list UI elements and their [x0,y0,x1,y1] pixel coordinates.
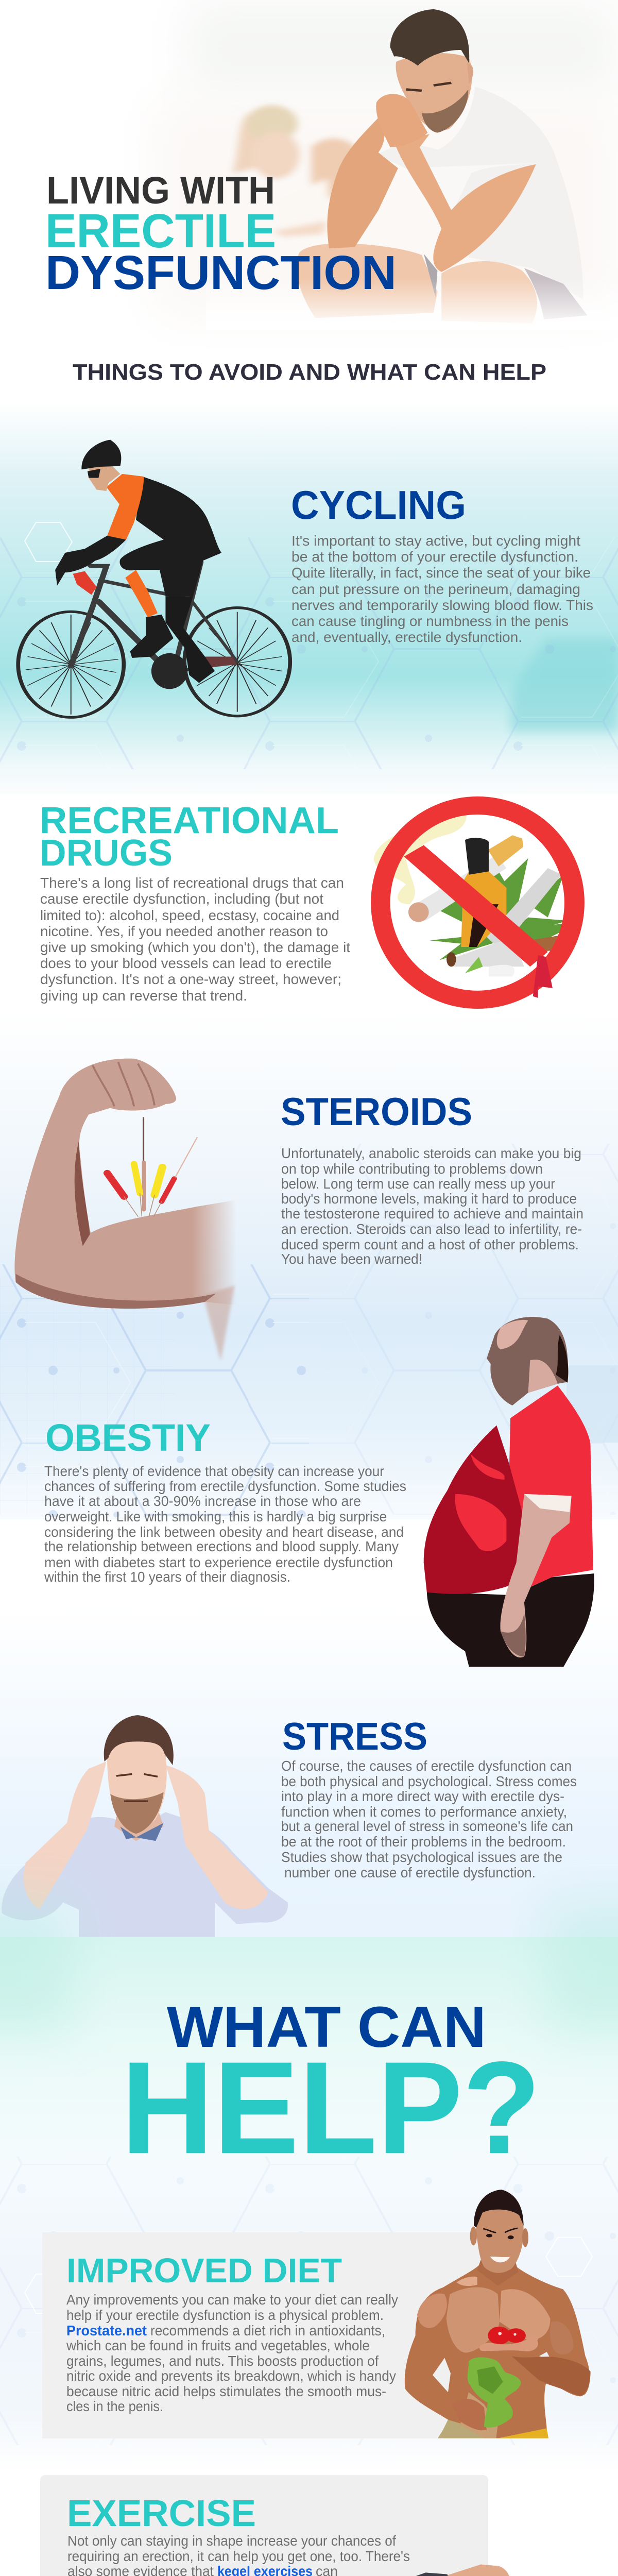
arm [14,1059,236,1309]
panel: cycling background [0,402,618,794]
heading: CYCLING [291,482,466,528]
shorts [260,2572,459,2576]
body: have it at about a 30-90% increase in those who are [44,1493,361,1509]
section: obesity text [44,1416,406,1585]
body: because nitric acid helps stimulates the smooth mus- [66,2383,386,2399]
hair [474,2190,524,2227]
drivetrain [151,653,187,689]
body [40,875,350,1004]
biceps lower shadow [16,1274,216,1309]
body: be both physical and psychological. Stress comes [281,1773,577,1789]
body: requiring an erection, it can help you get one, too. There's [67,2548,410,2564]
thigh [448,2564,513,2576]
heading: what can help: HELP? [121,2035,541,2181]
body: cause erectile dysfunction, including (but not [40,891,323,907]
body: dysfunction. It's not a one-way street, however; [40,971,341,987]
beard [110,1792,164,1834]
body: within the first 10 years of their diagnosis. [44,1569,290,1585]
illustration: cyclist [18,440,290,717]
shoe [130,615,174,658]
smoke [374,799,467,904]
belly highlight [455,1494,506,1551]
ears [470,2227,528,2247]
hands [376,94,427,147]
chest highlights [447,2287,500,2353]
body: and, eventually, erectile dysfunction. [291,629,522,645]
title: LIVING WITH [46,169,275,212]
hair [390,9,469,66]
body: body's hormone levels, making it hard to produce [281,1191,577,1207]
syringe [487,868,562,950]
body: There's a long list of recreational drugs that can [40,875,344,891]
title [45,169,397,299]
body: does to your blood vessels can lead to erectile [40,955,332,971]
subtitle: THINGS TO AVOID AND WHAT CAN HELP [73,360,546,385]
body: Of course, the causes of erectile dysfunction can [281,1758,572,1774]
body: Not only can staying in shape increase your chances of [67,2533,396,2549]
body: chances of suffering from erectile dysfunction. Some studies [44,1478,406,1494]
arm [500,1494,572,1657]
forearms [24,1761,107,1910]
glove [55,549,96,586]
body [66,2292,398,2414]
face [475,2204,524,2273]
hero photo: sad man [297,9,587,324]
body: the relationship between erections and blood supply. Many [44,1538,399,1554]
body [281,1145,583,1267]
cigarette [410,855,506,921]
body: be at the bottom of your erectile dysfunction. [291,549,578,565]
body: nitric oxide and prevents its breakdown, which is handy [66,2368,396,2384]
front wheel [18,612,124,717]
helmet [81,440,121,469]
body: There's plenty of evidence that obesity can increase your [44,1463,384,1479]
inner arm shadow [75,1141,90,1246]
shirt back [508,1385,593,1595]
body [281,1758,577,1880]
head [487,1317,568,1405]
body: nerves and temporarily slowing blood flow. This [291,597,593,613]
hero background [154,0,618,317]
paper [460,2392,498,2438]
section: recreational drugs text [40,800,350,1004]
illustration: obese man [424,1317,594,1667]
panel: improved diet [42,2232,516,2438]
body: nicotine. Yes, if you needed another reason to [40,923,328,939]
right arm [394,134,536,272]
body: Any improvements you can make to your diet can really [66,2292,398,2308]
body [44,1463,406,1585]
body: into play in a more direct way with erectile dys- [281,1788,564,1804]
body: Studies show that psychological issues are the [281,1849,562,1865]
legs [297,243,437,318]
heading: IMPROVED DIET [66,2251,342,2290]
section: stress text [281,1715,577,1880]
body: can put pressure on the perineum, damaging [291,581,580,597]
body: Prostate.net [66,2323,147,2338]
hair [104,1715,174,1765]
body: limited to): alcohol, speed, ecstasy, cocaine and [40,907,339,923]
forearm [85,536,126,561]
heading: STRESS [282,1715,427,1758]
icon: no drugs sign [371,796,585,1009]
body: help if your erectile dysfunction is a physical problem. [66,2307,384,2323]
title: ERECTILE [45,204,276,258]
body: men with diabetes start to experience erectile dysfunction [44,1554,393,1570]
face [107,1740,167,1827]
ribbon [533,955,553,998]
neck [114,1808,164,1841]
section: steroids text [281,1090,583,1267]
body [67,2533,410,2576]
orange shin [125,570,158,617]
armpit gap [433,2358,451,2392]
hand holding [452,2399,487,2430]
open hand [479,2334,539,2351]
fingers shading [93,1062,154,1106]
rear leg [165,596,215,683]
heading [40,800,339,874]
illustration: man doing glute bridge [204,2564,550,2576]
body: can cause tingling or numbness in the penis [291,613,569,629]
body: but a general level of stress in someone's life can [281,1818,573,1834]
lettuce [468,2357,521,2428]
joint [448,937,524,967]
panel: steroids and obesity background [0,1010,618,1519]
section: cycling text [291,482,593,645]
sunglasses [88,469,100,478]
striped bar wrap [73,571,96,595]
left arm [327,115,398,248]
body: Quite literally, in fact, since the seat of your bike [291,565,591,581]
body: It's important to stay active, but cycling might [291,533,580,549]
shirt [2,1812,288,1937]
body: on top while contributing to problems down [281,1161,543,1177]
body [291,533,593,645]
illustration: muscular man with vegetables [405,2190,591,2438]
shirt [376,87,583,300]
panel: recreational drugs background [0,794,618,1010]
body: the testosterone required to achieve and maintain [281,1206,583,1222]
body: considering the link between obesity and heart disease, and [44,1524,404,1540]
prohibition ring [371,796,585,1009]
frame [71,562,237,672]
illustration: stressed man [2,1715,288,1937]
illustration: flexing arm with syringes [14,1059,236,1361]
face and neck [89,466,120,491]
eyes and brows [483,2228,518,2239]
syringes [107,1118,197,1216]
panel: exercise [40,2475,488,2576]
forearm shade [511,2356,591,2397]
leaves [430,858,583,960]
eyes [406,83,451,91]
hero photo: woman in background [233,105,358,236]
heading: RECREATIONAL [40,800,339,841]
heading: DRUGS [40,833,173,874]
orange sleeve [107,474,144,539]
panel: what can help background [0,1901,618,2473]
body: which can be found in fruits and vegetables, whole [66,2337,370,2353]
body: give up smoking (which you don't), the damage it [40,939,350,955]
rear wheel [184,608,290,716]
body: duced sperm count and a host of other problems. [281,1236,579,1252]
heading: OBESTIY [45,1416,211,1459]
body: grains, legumes, and nuts. This boosts production of [66,2353,379,2369]
body: be at the root of their problems in the bedroom. [281,1834,566,1850]
body: below. Long term use can really mess up your [281,1176,555,1192]
torso and arms [405,2265,590,2438]
face [396,53,472,130]
bottle [461,840,506,947]
body: overweight. Like with smoking, this is hardly a big surprise [44,1509,387,1524]
heading: what can help: WHAT CAN [167,1995,486,2059]
trousers [427,1573,594,1667]
neck [477,2260,519,2286]
title: DYSFUNCTION [45,246,397,299]
body: number one cause of erectile dysfunction. [284,1865,536,1880]
smile [490,2257,510,2262]
body: giving up can reverse that trend. [40,988,247,1004]
panel: stress background [0,1606,618,1937]
heading: STEROIDS [281,1090,472,1134]
closed eyes and mouth [116,1774,158,1801]
torso and thigh [119,477,221,596]
body: recommends a diet rich in antioxidants, [150,2323,385,2338]
waistband [438,2420,548,2438]
tomatoes [488,2327,526,2345]
heading: EXERCISE [67,2493,256,2534]
body: function when it comes to performance anxiety, [281,1804,567,1820]
collar [120,1823,164,1841]
body: Unfortunately, anabolic steroids can make you big [281,1145,581,1161]
body: cles in the penis. [66,2398,163,2414]
body: an erection. Steroids can also lead to infertility, re- [281,1221,582,1237]
belly [424,1426,524,1594]
body: You have been warned! [281,1251,422,1267]
trailing arm fade [203,1285,234,1361]
prohibition bar [404,845,548,967]
hero photo bottom fade [206,278,618,330]
